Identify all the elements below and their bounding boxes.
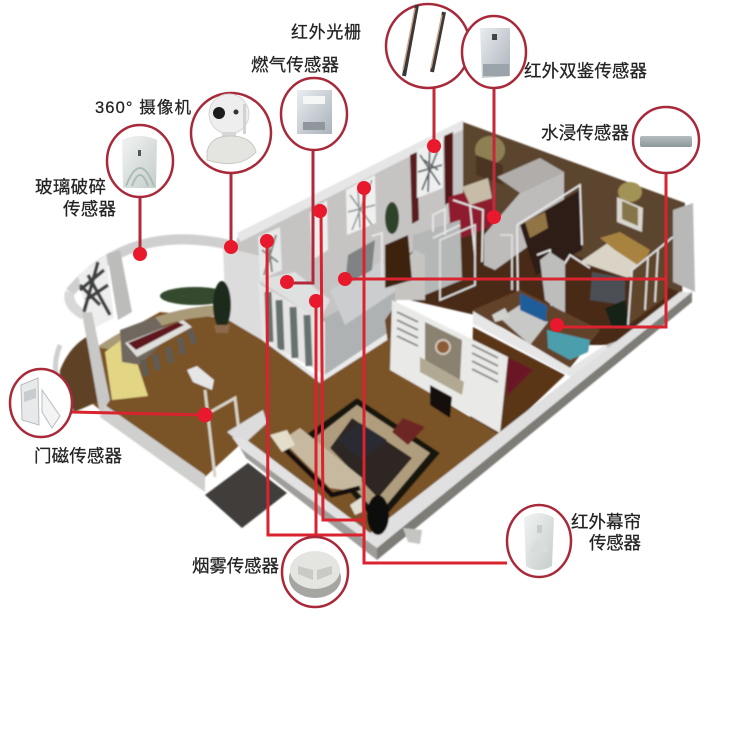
label: infrared grating: 红外光栅 (291, 23, 361, 42)
right end wall (673, 203, 695, 292)
fireplace wall (390, 300, 508, 433)
label: infrared curtain line two: 传感器 (589, 533, 641, 553)
balcony floor and low wall (60, 305, 218, 413)
sensor: water leak (633, 107, 699, 173)
label: gas sensor: 燃气传感器 (251, 55, 339, 75)
label: infrared curtain line one: 红外幕帘 (571, 512, 641, 532)
label: dual detector: 红外双鉴传感器 (524, 61, 647, 81)
label: water leak: 水浸传感器 (541, 123, 629, 143)
sensor: dual detector (462, 16, 526, 88)
rug and sofa (270, 398, 440, 535)
label: smoke: 烟雾传感器 (192, 556, 279, 576)
label: glass break sensor line one: 玻璃破碎 (35, 177, 106, 197)
right bedroom (517, 185, 673, 330)
label: glass break sensor line two: 传感器 (63, 199, 116, 219)
potted plant (160, 202, 399, 333)
upper bedroom floors (395, 215, 680, 345)
outer walls (232, 292, 692, 560)
sensor: door magnet (10, 369, 72, 437)
bath room with TV and tub (473, 290, 631, 377)
door mat (205, 463, 287, 528)
label: camera: 360° 摄像机 (95, 98, 192, 117)
small bedroom floor (470, 327, 565, 437)
floor plan illustration (55, 120, 695, 560)
dining table (120, 317, 194, 376)
label: door magnet: 门磁传感器 (34, 446, 122, 466)
sensor: infrared grating (386, 4, 470, 88)
sensor: smoke (282, 537, 348, 607)
door frames and low partition (100, 366, 267, 492)
sensor wiring lines (70, 88, 666, 563)
glass room and bath (258, 233, 425, 384)
sensor: glass break (107, 125, 173, 197)
living floor (70, 312, 500, 540)
sensor: infrared curtain (507, 505, 571, 577)
arch wall (55, 239, 230, 415)
back-right wallpaper wall (463, 122, 685, 298)
sensor: camera (191, 93, 271, 173)
sensor location dots (133, 139, 564, 422)
back-left wall (223, 120, 466, 345)
sensor: gas (281, 78, 347, 150)
partition block and red bed (412, 158, 564, 300)
